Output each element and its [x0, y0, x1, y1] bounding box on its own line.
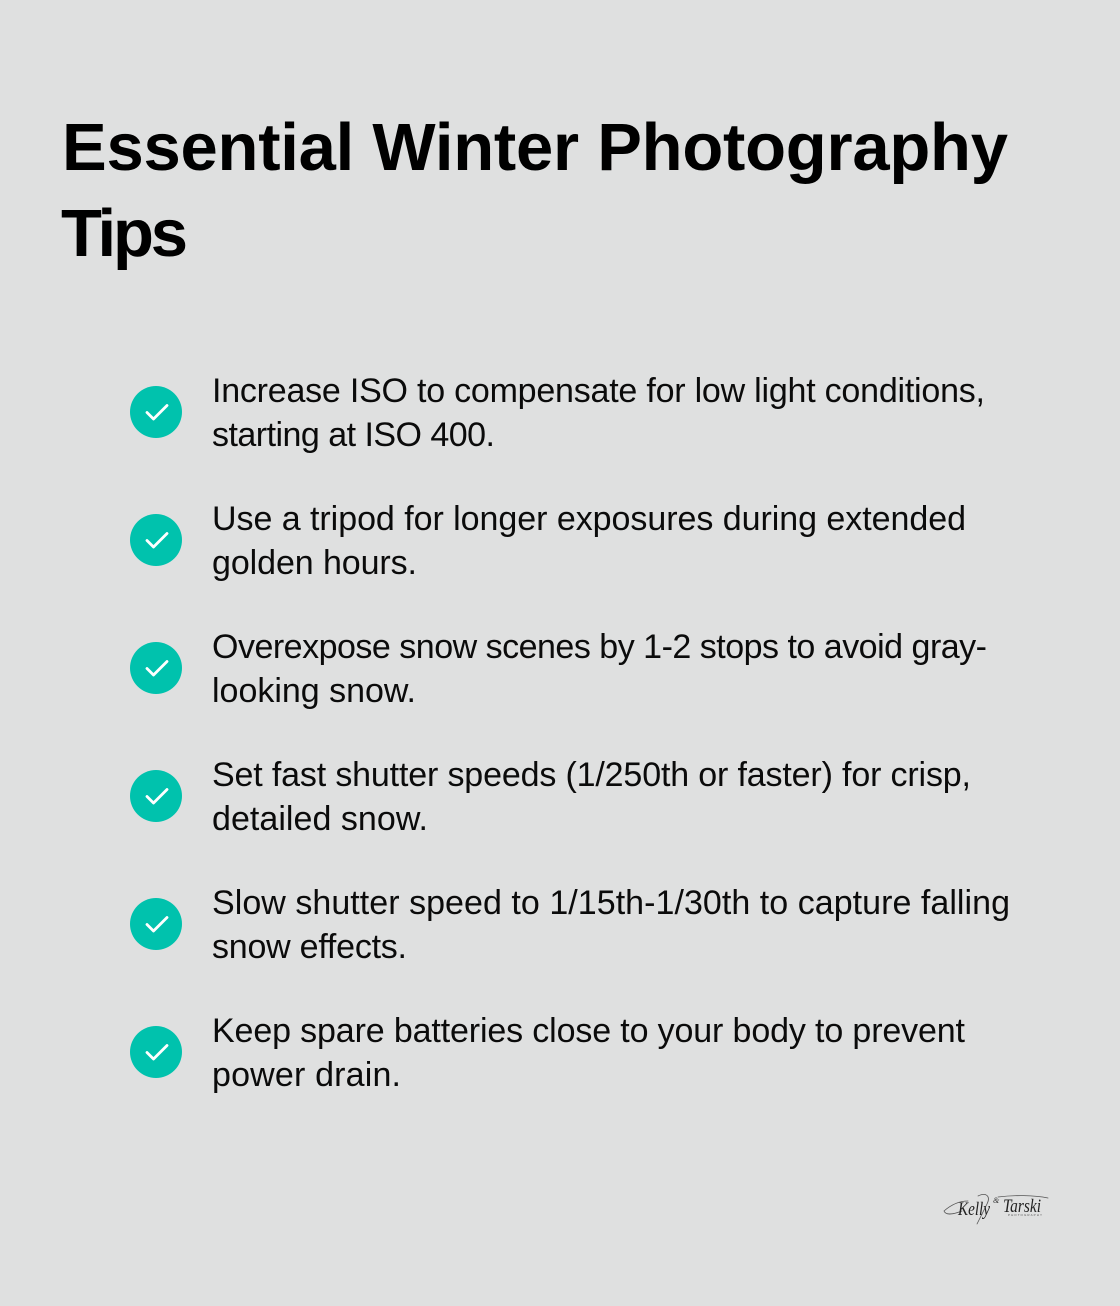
tip 3: Overexpose snow scenes by 1-2 stops to avoid gray-	[212, 628, 987, 666]
title: Tips	[61, 196, 188, 271]
tip 3: looking snow.	[212, 672, 416, 710]
tip 1	[130, 372, 985, 454]
title	[61, 110, 1008, 271]
tip 6: power drain.	[212, 1056, 401, 1094]
signature logo: PHOTOGRAPHY	[1008, 1213, 1042, 1217]
checklist	[130, 372, 1010, 1094]
tip 4: detailed snow.	[212, 800, 428, 838]
tip 1: starting at ISO 400.	[212, 416, 495, 454]
tip 2	[130, 500, 966, 582]
tip 2: golden hours.	[212, 544, 417, 582]
tip 5: snow effects.	[212, 928, 407, 966]
signature logo: Tarski	[1003, 1196, 1041, 1217]
tip 5	[130, 884, 1010, 966]
tip 4: Set fast shutter speeds (1/250th or faster) for crisp,	[212, 756, 971, 794]
signature logo: &	[993, 1196, 1000, 1205]
tip 6: Keep spare batteries close to your body to prevent	[212, 1012, 966, 1050]
title: Essential Winter Photography	[62, 110, 1008, 185]
signature logo: Kelly	[957, 1199, 990, 1220]
signature logo	[944, 1194, 1048, 1224]
tip 6	[130, 1012, 966, 1094]
tip 3	[130, 628, 987, 710]
tip 4	[130, 756, 971, 838]
tip 1: Increase ISO to compensate for low light conditions,	[212, 372, 985, 410]
tip 5: Slow shutter speed to 1/15th-1/30th to capture falling	[212, 884, 1010, 922]
tip 2: Use a tripod for longer exposures during extended	[212, 500, 966, 538]
